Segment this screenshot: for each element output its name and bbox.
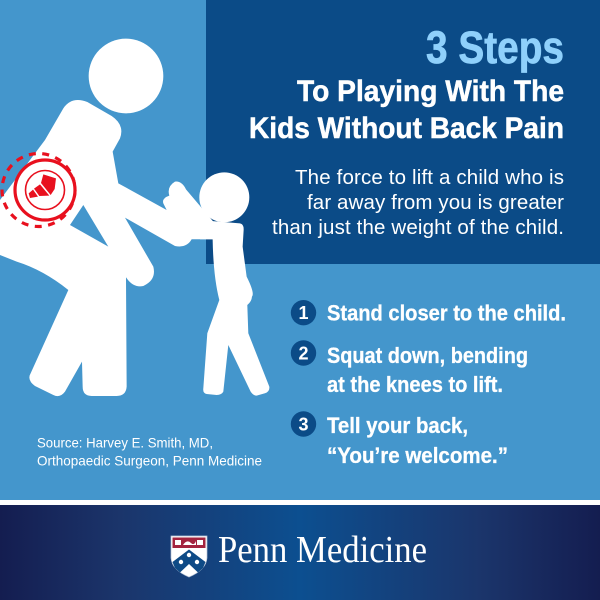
- step 2 text: [327, 343, 528, 397]
- shield red chief: [172, 538, 206, 548]
- shield chevron: [172, 550, 206, 572]
- shield outline: [171, 536, 207, 577]
- title: Kids Without Back Pain: [249, 112, 564, 145]
- badge number 1: 1: [298, 303, 309, 323]
- step 2: [291, 340, 528, 397]
- source note: [37, 434, 262, 468]
- step 3 text: [327, 413, 508, 468]
- source note: Source: Harvey E. Smith, MD,: [37, 434, 213, 450]
- icon: back pain target: [2, 154, 75, 226]
- dashed pain ring: [2, 154, 75, 226]
- description text: far away from you is greater: [307, 191, 564, 214]
- badge 2: [291, 340, 316, 366]
- shield books and dolphin: [175, 540, 203, 545]
- panel: header: [206, 0, 600, 264]
- step 3 text: “You’re welcome.”: [327, 443, 508, 468]
- title: [249, 22, 564, 145]
- white divider: [0, 500, 600, 505]
- adult body: [0, 100, 213, 396]
- child body: [200, 221, 269, 396]
- step 2 text: at the knees to lift.: [327, 372, 503, 397]
- solid outer ring: [15, 160, 75, 220]
- badge number 3: 3: [298, 414, 309, 434]
- step 1 text: Stand closer to the child.: [327, 300, 566, 326]
- logo: Penn shield: [171, 536, 207, 577]
- badge 3: [291, 411, 316, 437]
- inner ring: [26, 170, 64, 210]
- step 3 text: Tell your back,: [327, 413, 468, 438]
- child head: [199, 172, 249, 222]
- step 2 text: Squat down, bending: [327, 343, 528, 368]
- title: 3 Steps: [426, 22, 564, 73]
- footer band: [0, 505, 600, 600]
- illustration: adult lifting child: [0, 39, 269, 396]
- badge number 2: 2: [298, 343, 309, 363]
- adult head: [89, 39, 163, 113]
- description text: [272, 166, 564, 239]
- description text: than just the weight of the child.: [272, 216, 564, 239]
- logo: wordmark: Penn Medicine: [218, 529, 427, 571]
- badge 1: [291, 300, 316, 325]
- title: To Playing With The: [297, 75, 564, 108]
- source note: Orthopaedic Surgeon, Penn Medicine: [37, 452, 262, 468]
- description text: The force to lift a child who is: [295, 166, 564, 189]
- step 1: [291, 300, 566, 326]
- step 3: [291, 411, 508, 468]
- shield roundels: [179, 553, 199, 564]
- spine vertebrae: [29, 174, 56, 198]
